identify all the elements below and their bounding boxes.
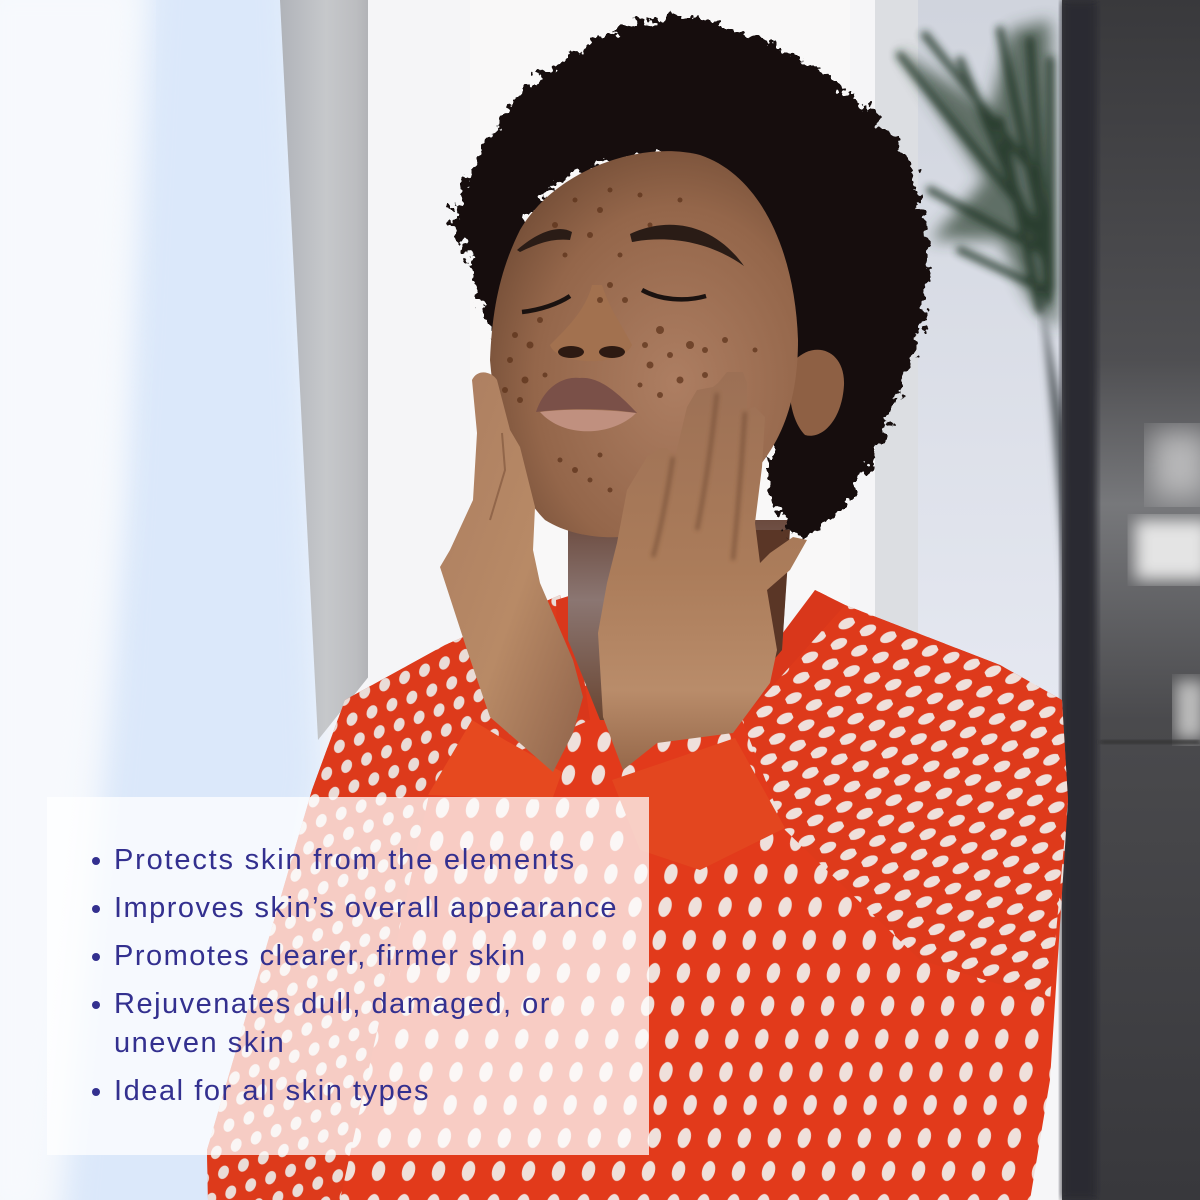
dark blurred foreground	[1062, 0, 1200, 1200]
sweater upper right, body	[740, 590, 1068, 1000]
text panel: benefits	[47, 797, 649, 1155]
face	[490, 151, 798, 537]
bullet: rejuvenates: uneven skin	[114, 1027, 285, 1059]
lips	[536, 378, 637, 413]
ear	[790, 350, 844, 436]
sweater left sleeve	[207, 595, 590, 1200]
bullet: protects: Protects skin from the elements	[114, 844, 576, 876]
bullet: ideal: Ideal for all skin types	[114, 1075, 430, 1107]
neck	[568, 520, 790, 720]
nose	[550, 285, 632, 361]
freckles	[502, 188, 758, 492]
bullet: promotes: Promotes clearer, firmer skin	[114, 940, 527, 972]
bullet: rejuvenates	[114, 985, 551, 1063]
bullet: rejuvenates: Rejuvenates dull, damaged, or	[114, 988, 551, 1020]
plant	[900, 20, 1066, 600]
collar	[556, 590, 845, 720]
hand: left	[440, 372, 583, 772]
cuff: left	[428, 720, 562, 800]
eyebrows	[517, 225, 744, 266]
bullet: improves: Improves skin’s overall appearance	[114, 892, 618, 924]
hand: right	[598, 372, 807, 770]
sweater	[207, 590, 1068, 1200]
hair	[452, 15, 929, 538]
eyes	[522, 290, 706, 312]
cuff: right	[612, 738, 785, 870]
